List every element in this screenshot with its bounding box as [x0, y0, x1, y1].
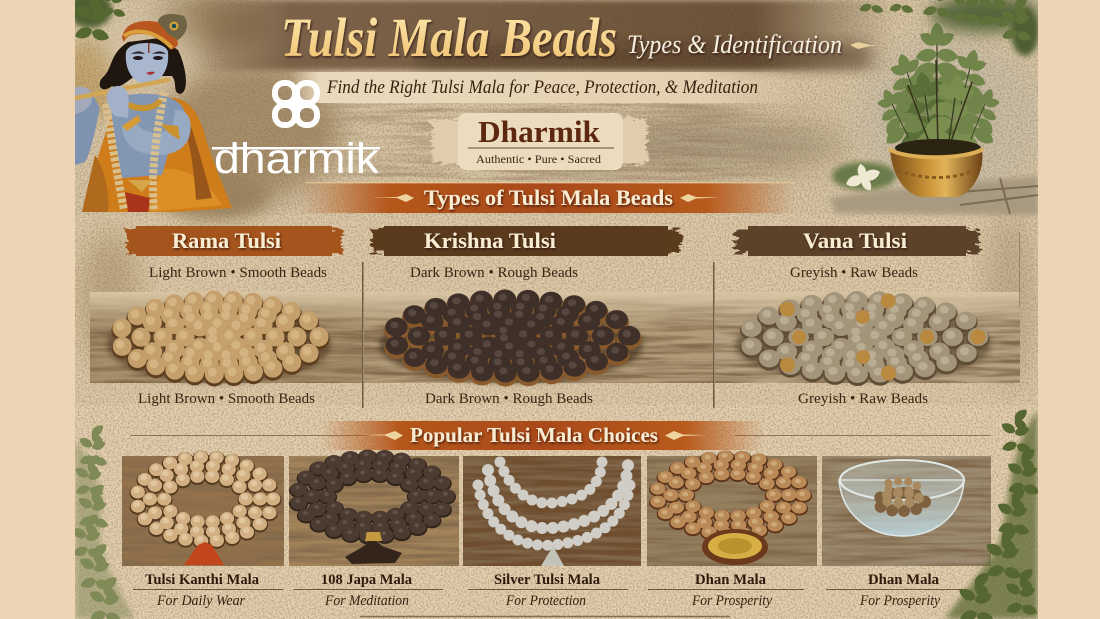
- orange shawl: [85, 98, 232, 212]
- use: For Prosperity: [859, 593, 941, 609]
- krishna top descriptor: Dark Brown • Rough Beads: [410, 265, 578, 281]
- banner: popular choices: [130, 421, 990, 450]
- rama heading band: [126, 226, 342, 256]
- peacock feather: [158, 14, 187, 40]
- vana bottom descriptor: Greyish • Raw Beads: [798, 391, 928, 407]
- gold pot: [889, 139, 983, 197]
- column: rama tulsi: [90, 226, 362, 407]
- rama top descriptor: Light Brown • Smooth Beads: [149, 265, 327, 281]
- use: For Prosperity: [691, 593, 773, 609]
- right arm: [122, 110, 191, 155]
- foliage: bottom right: [945, 407, 1041, 619]
- left arm: [75, 90, 100, 165]
- tagline: Find the Right Tulsi Mala for Peace, Protection, & Meditation: [326, 78, 758, 98]
- torso: [112, 94, 185, 178]
- rama ground: [90, 292, 362, 383]
- vana heading: Vana Tulsi: [803, 228, 907, 253]
- subtitle types and identification: Types & Identification: [627, 30, 842, 59]
- card: dhan mala prosperity: [647, 455, 817, 609]
- plaque brand: Dharmik: [478, 114, 601, 149]
- photo: [122, 456, 284, 566]
- name: 108 Japa Mala: [321, 572, 412, 588]
- flute: [75, 80, 168, 98]
- gold armlets: [122, 115, 141, 131]
- flower shrub: [832, 162, 896, 190]
- krishna bottom descriptor: Dark Brown • Rough Beads: [425, 391, 593, 407]
- tassel: [345, 532, 402, 564]
- krishna beads: [379, 297, 643, 383]
- bottom ornament line: [360, 616, 730, 618]
- face details: [131, 43, 166, 75]
- parchment panel: [75, 0, 1038, 405]
- vana ground: [715, 292, 1020, 383]
- plaque tagline: Authentic • Pure • Sacred: [476, 152, 601, 166]
- dhoti folds: [150, 169, 222, 212]
- plant foliage: [878, 22, 1000, 145]
- face: [126, 43, 168, 84]
- pendant: [541, 546, 564, 566]
- use: For Protection: [505, 593, 586, 609]
- card: dhan mala in water bowl: [822, 456, 991, 609]
- vana top descriptor: Greyish • Raw Beads: [790, 265, 918, 281]
- krishna ground: [364, 292, 713, 383]
- hair: [100, 38, 186, 94]
- subtitle band: [290, 72, 800, 103]
- necklace: [656, 455, 803, 535]
- column: krishna tulsi: [364, 226, 713, 407]
- foliage: top right: [857, 0, 1040, 56]
- card: silver tulsi mala: [463, 456, 641, 609]
- use: For Meditation: [324, 593, 409, 609]
- necklace strands: [478, 462, 630, 545]
- column divider: [362, 262, 364, 408]
- necklace: [297, 454, 446, 537]
- title: Tulsi Mala Beads: [281, 7, 617, 68]
- tulsi plant in pot: [830, 22, 1038, 215]
- name: Dhan Mala: [868, 572, 939, 588]
- turban: [122, 21, 178, 50]
- banner heading: Types of Tulsi Mala Beads: [424, 185, 673, 210]
- tassel: [184, 542, 224, 565]
- glass bowl: [839, 460, 964, 536]
- necklace: [136, 455, 273, 542]
- photo: [463, 456, 641, 566]
- use: For Daily Wear: [156, 593, 245, 609]
- photo: [647, 456, 817, 566]
- header dark smear: [190, 0, 895, 70]
- glow behind krishna: [100, 10, 200, 90]
- vana heading band: [735, 226, 979, 256]
- photo: [822, 456, 991, 566]
- krishna figure: [75, 10, 232, 212]
- gold medallion: [702, 529, 768, 565]
- column divider: [713, 262, 714, 408]
- dharmik plaque: [432, 113, 647, 170]
- rama heading: Rama Tulsi: [172, 228, 281, 253]
- header dark lower band: [420, 44, 870, 68]
- rama bottom descriptor: Light Brown • Smooth Beads: [138, 391, 315, 407]
- name: Silver Tulsi Mala: [494, 572, 600, 588]
- krishna heading: Krishna Tulsi: [424, 228, 556, 253]
- banner ornaments: [360, 431, 706, 440]
- garlands: [106, 92, 164, 210]
- banner ornaments: [372, 194, 720, 202]
- logo mark: [275, 83, 317, 125]
- title ornament arrow: [850, 42, 884, 49]
- rama beads: [107, 298, 331, 383]
- photo: [289, 456, 459, 566]
- krishna heading band: [372, 226, 680, 256]
- stone ledge: [830, 176, 1038, 215]
- left hand: [75, 87, 92, 114]
- card: tulsi kanthi mala: [122, 455, 284, 609]
- logo wordmark: dharmik: [214, 135, 380, 183]
- right hand: [107, 86, 129, 118]
- white flower: [846, 164, 880, 190]
- foliage: bottom left: [71, 423, 135, 619]
- name: Tulsi Kanthi Mala: [145, 572, 259, 588]
- frame line right: [1019, 232, 1020, 307]
- card: 108 japa mala: [289, 454, 459, 609]
- name: Dhan Mala: [695, 572, 766, 588]
- vana beads: [735, 298, 991, 381]
- banner: types of tulsi mala beads: [300, 182, 795, 213]
- banner heading: Popular Tulsi Mala Choices: [410, 423, 658, 447]
- foliage: top left: [75, 0, 126, 40]
- column: vana tulsi: [715, 226, 1020, 407]
